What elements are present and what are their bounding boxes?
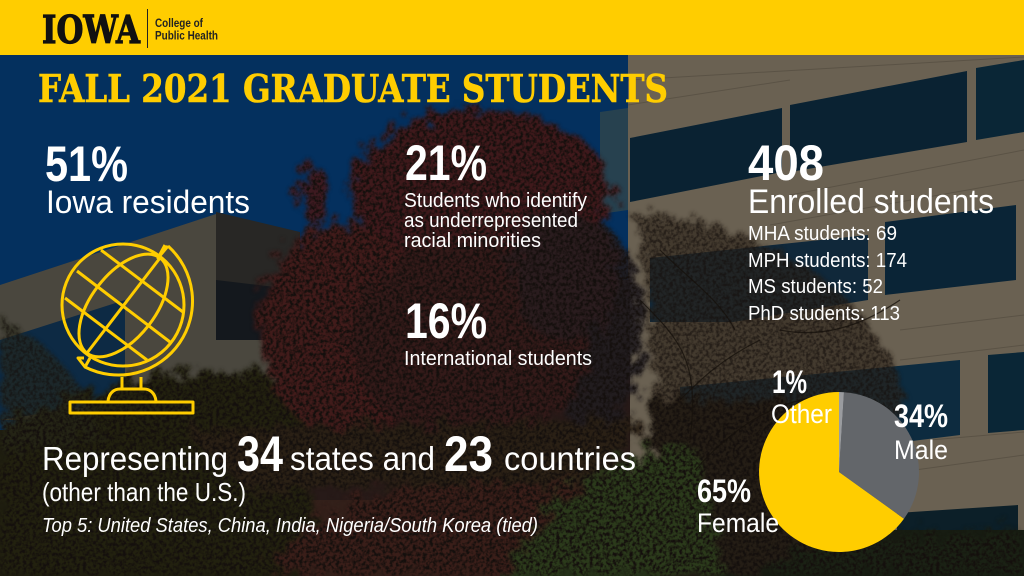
stat: international students [404,293,592,370]
background: bare branches [640,250,900,470]
logo: University of Iowa College of Public Health [42,7,218,52]
logo: University of Iowa College of Public Health: IOWA [42,7,140,52]
stat: Iowa residents: Iowa residents [46,184,250,220]
pie label: other: Other [771,399,832,429]
title: FALL 2021 GRADUATE STUDENTS [38,67,668,112]
pie label: female [697,473,779,538]
pie label: female: Female [697,508,779,538]
pie label: male [894,398,948,465]
stat: enrolled students: MPH students: 174 [748,250,907,272]
stat: underrepresented minorities: as underrepresented [404,209,578,232]
stat: underrepresented minorities [404,135,588,252]
stat: states and countries: 23 [444,426,493,482]
stat: states and countries: (other than the U.S.) [42,477,246,507]
stat: international students: International students [404,347,592,370]
pie label: female: 65% [697,473,751,509]
stat: underrepresented minorities: racial minorities [404,229,541,252]
stat: enrolled students: MS students: 52 [748,276,883,298]
stat: underrepresented minorities: 21% [405,135,487,191]
stat: states and countries: 34 [237,426,283,482]
icon: globe [62,238,193,413]
stat: underrepresented minorities: Students who identify [404,189,588,212]
background: left building [0,212,300,420]
stat: enrolled students: MHA students: 69 [748,223,897,245]
stat: states and countries: countries [504,440,636,477]
stat: Iowa residents [45,136,250,220]
pie label: other: 1% [772,364,807,400]
stat: Iowa residents: 51% [45,136,128,192]
stat: states and countries: Representing [42,440,228,477]
pie label: male: 34% [894,398,948,434]
stat: states and countries [42,426,636,537]
logo: University of Iowa College of Public Health: Public Health [155,30,218,42]
pie label: male: Male [894,435,948,465]
stat: enrolled students: Enrolled students [748,183,994,221]
stat: enrolled students: PhD students: 113 [748,303,900,325]
background: right building [600,55,1024,576]
stat: states and countries: states and [290,440,435,477]
background: lower foliage base [0,280,1024,576]
logo: University of Iowa College of Public Health: College of [155,18,203,30]
stat: international students: 16% [405,293,487,349]
header bar [0,0,1024,55]
stat: states and countries: Top 5: United States, China, India, Nigeria/South Korea (tied) [42,515,538,537]
stat: enrolled students [748,135,994,325]
stat: enrolled students: 408 [748,135,824,191]
pie chart: gender [759,392,919,552]
pie label: other [771,364,832,429]
